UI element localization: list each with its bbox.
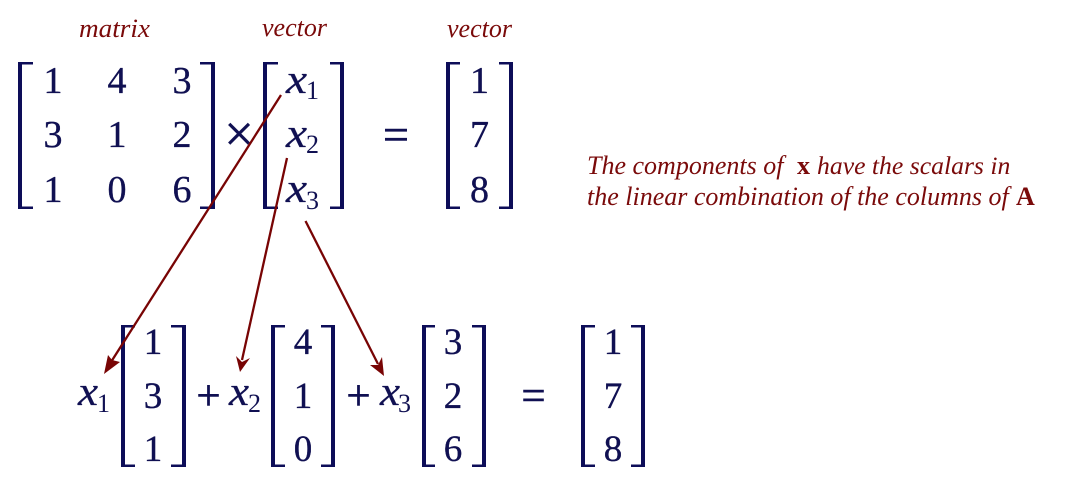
- equals sign: =: [383, 109, 409, 160]
- explanatory note: have the scalars in: [817, 151, 1010, 180]
- matrix A: [18, 60, 215, 211]
- result vector: [446, 60, 513, 211]
- arrow: x1 to first term: [104, 95, 281, 374]
- plus sign: +: [196, 373, 221, 420]
- explanatory note: A: [1016, 182, 1035, 211]
- explanatory note: [587, 151, 1035, 211]
- vector x: x: [285, 110, 307, 156]
- matrix A: 6: [172, 169, 192, 211]
- term: x2 times column 2: 1: [294, 376, 312, 417]
- vector x: 2: [306, 130, 319, 159]
- plus sign: +: [346, 373, 371, 420]
- equals sign: =: [521, 373, 546, 420]
- multiplication sign: ×: [224, 106, 254, 163]
- term: x1 times column 1: [77, 322, 186, 470]
- matrix A: 2: [172, 114, 192, 156]
- term: x1 times column 1: 1: [144, 322, 162, 363]
- term: x2 times column 2: [228, 322, 335, 470]
- label: matrix: matrix: [79, 14, 150, 43]
- result vector: [581, 322, 645, 470]
- arrow: x2 to second term: [236, 158, 287, 372]
- term: x2 times column 2: 4: [294, 322, 312, 363]
- vector x: [263, 56, 344, 215]
- result vector: 7: [470, 114, 489, 156]
- result vector: 1: [604, 322, 622, 363]
- matrix A: 3: [172, 60, 192, 102]
- explanatory note: the linear combination of the columns of: [587, 182, 1009, 211]
- matrix A: 3: [44, 114, 62, 156]
- term: x3 times column 3: 3: [398, 389, 411, 418]
- term: x3 times column 3: x: [379, 368, 400, 414]
- vector x: x: [285, 165, 307, 211]
- result vector: 8: [470, 169, 489, 211]
- explanatory note: The components of: [587, 151, 783, 180]
- term: x3 times column 3: 2: [444, 376, 462, 417]
- vector x: 1: [306, 76, 319, 105]
- term: x2 times column 2: 2: [248, 389, 261, 418]
- matrix A: 4: [108, 60, 126, 102]
- term: x2 times column 2: 0: [294, 429, 312, 470]
- term: x3 times column 3: [379, 322, 486, 470]
- matrix A: 1: [44, 169, 62, 211]
- term: x1 times column 1: 1: [97, 389, 110, 418]
- term: x1 times column 1: 1: [144, 429, 162, 470]
- label: second vector: vector: [447, 14, 513, 43]
- matrix A: 1: [108, 114, 126, 156]
- term: x2 times column 2: x: [228, 368, 249, 414]
- matrix A: 1: [44, 60, 62, 102]
- term: x3 times column 3: 6: [444, 429, 462, 470]
- term: x3 times column 3: 3: [444, 322, 462, 363]
- result vector: 8: [604, 429, 622, 470]
- vector x: 3: [306, 186, 319, 215]
- vector x: x: [285, 56, 307, 102]
- label: first vector: vector: [262, 13, 328, 42]
- term: x1 times column 1: x: [77, 368, 98, 414]
- matrix A: 0: [108, 169, 126, 211]
- term: x1 times column 1: 3: [144, 376, 162, 417]
- arrow: x3 to third term: [306, 221, 384, 376]
- result vector: 1: [470, 60, 489, 102]
- explanatory note: x: [797, 151, 810, 180]
- result vector: 7: [604, 376, 622, 417]
